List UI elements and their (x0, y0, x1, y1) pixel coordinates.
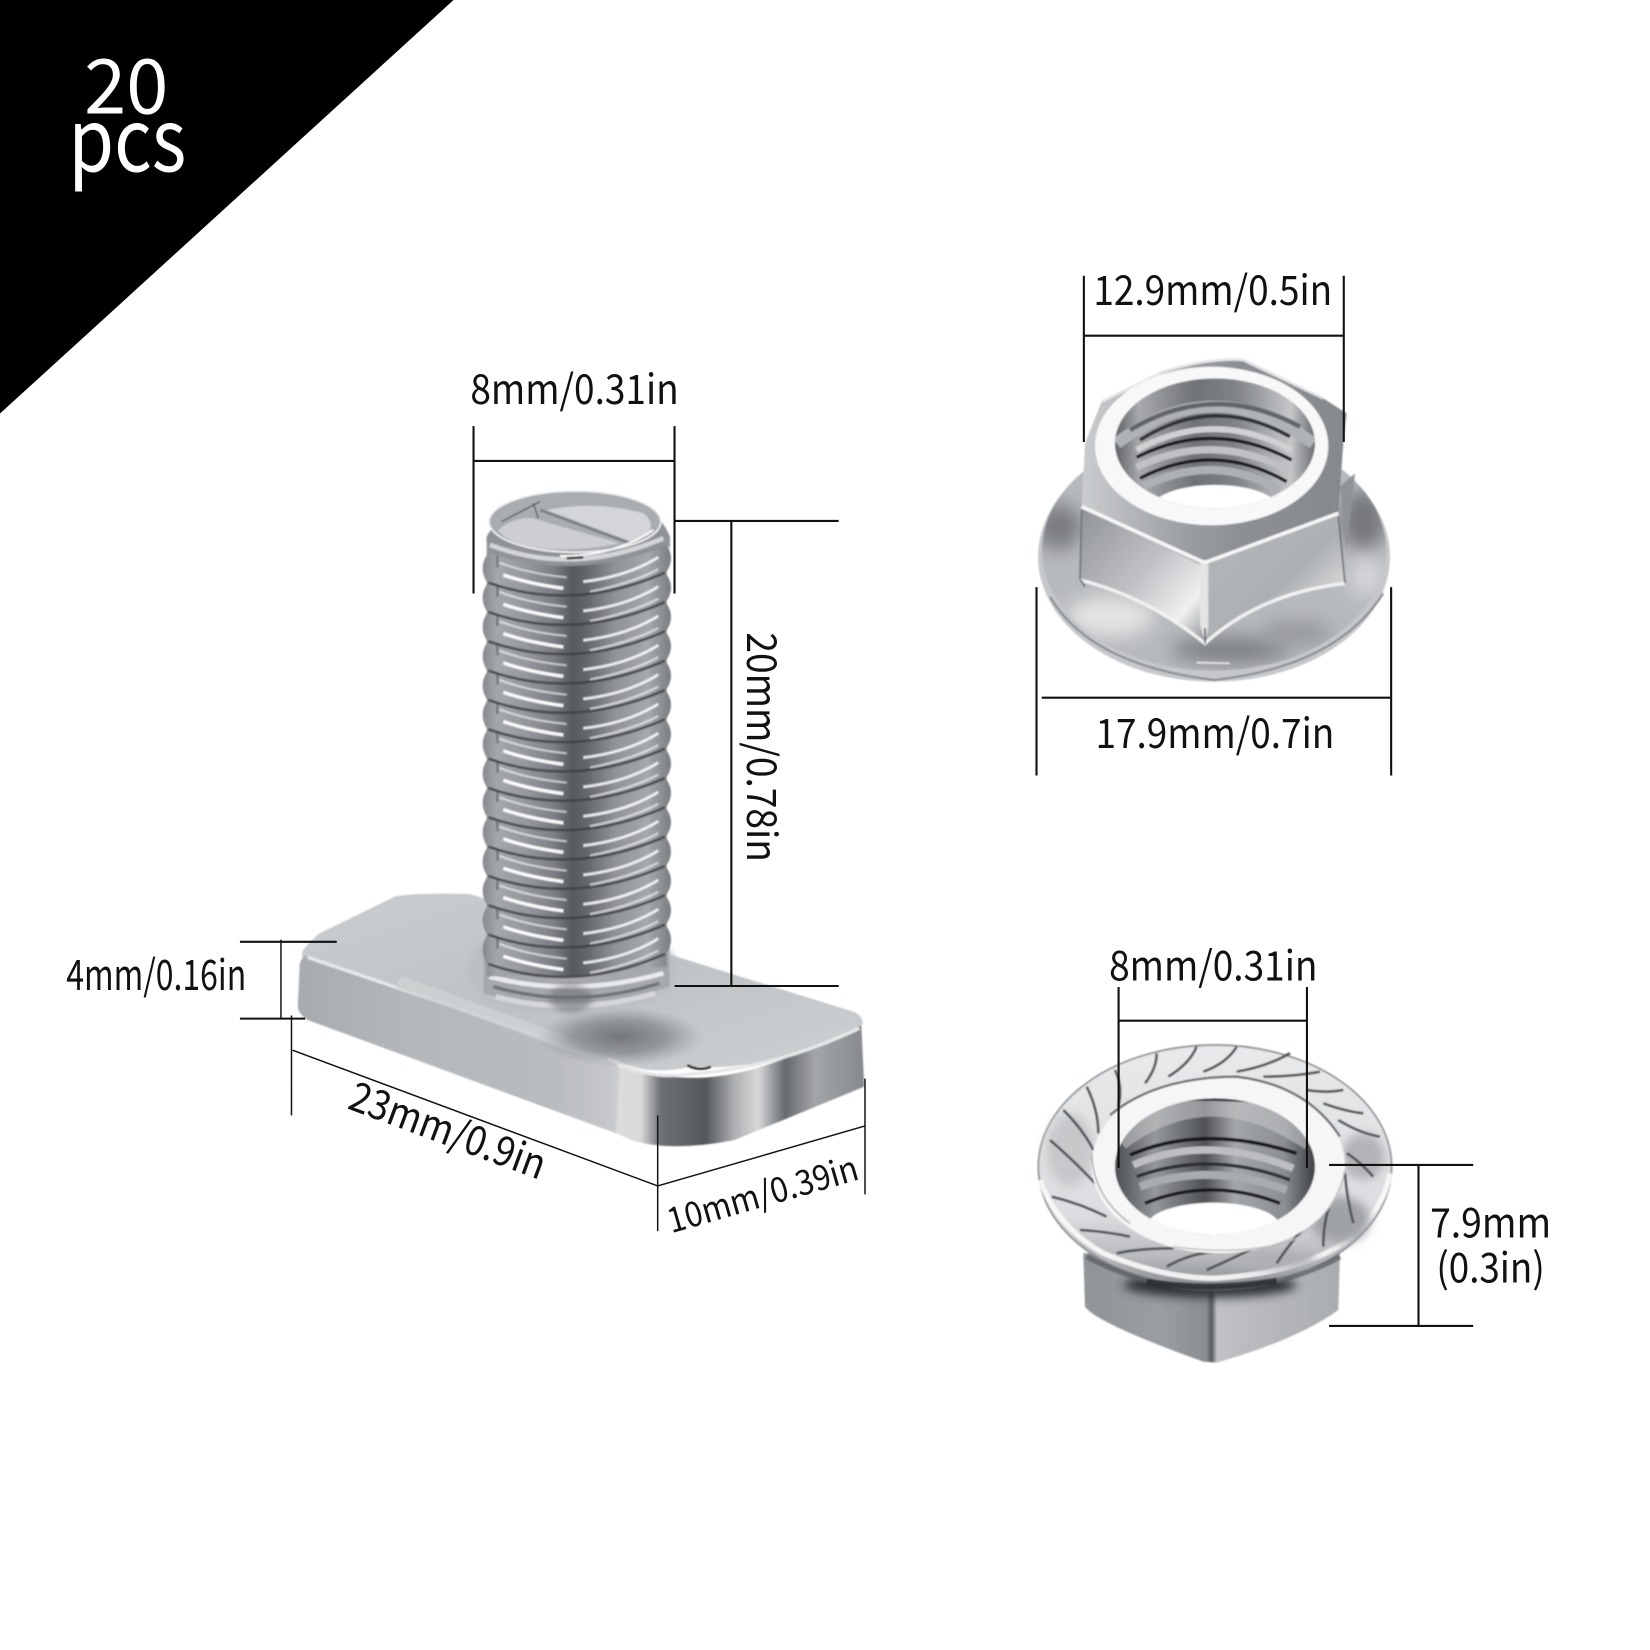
shadow below shaft (537, 1007, 703, 1067)
top nut hex faces (1080, 473, 1355, 643)
top nut flange (1037, 469, 1390, 682)
dimension: nut height 7.9mm (0.3in): (0.3in) (1436, 1235, 1545, 1295)
top flange nut (1035, 360, 1390, 682)
dimension: hex width 12.9mm/0.5in (1084, 257, 1344, 442)
dimension: flange diameter 17.9mm/0.7in: 17.9mm/0.7in (1095, 700, 1334, 760)
dimension: bolt diameter 8mm/0.31in (470, 356, 679, 593)
shaft collar (466, 943, 676, 1014)
slotted bolt end (486, 491, 670, 566)
bottom nut hex body (1083, 1253, 1340, 1363)
bottom nut serrated flange (1038, 1045, 1392, 1298)
dimension: head length 23mm/0.9in: 23mm/0.9in (342, 1063, 556, 1191)
plate top face (302, 894, 863, 1070)
corner badge: 20 pcs: 20 (84, 26, 168, 136)
dimension: nut height 7.9mm (0.3in) (1329, 1165, 1551, 1326)
dimension: head width 10mm/0.39in (658, 1079, 865, 1243)
top nut chamfered cap (1082, 360, 1347, 563)
top nut threaded bore (1114, 378, 1316, 498)
T-bolt head plate (298, 894, 864, 1146)
dimension: head thickness 4mm/0.16in: 4mm/0.16in (66, 942, 246, 1003)
bottom flange nut (1038, 1045, 1392, 1363)
dimension: head width 10mm/0.39in: 10mm/0.39in (660, 1141, 863, 1243)
dimension: head length 23mm/0.9in (291, 1015, 658, 1231)
dimension: hex width 12.9mm/0.5in: 12.9mm/0.5in (1093, 257, 1332, 317)
dimension: flange diameter 17.9mm/0.7in (1037, 587, 1391, 776)
bottom nut washer face (1092, 1077, 1345, 1253)
dimension: bolt length 20mm/0.78in: 20mm/0.78in (735, 632, 795, 862)
dimension: nut height 7.9mm (0.3in): 7.9mm (1430, 1190, 1551, 1250)
dimension: bolt length 20mm/0.78in (675, 521, 839, 986)
corner badge: 20 pcs: pcs (68, 72, 186, 198)
corner badge: 20 pcs (0, 0, 454, 414)
bottom nut threaded bore (1115, 1098, 1315, 1251)
plate bevel highlight (308, 957, 859, 1075)
dimension: bolt diameter 8mm/0.31in: 8mm/0.31in (470, 356, 679, 416)
plate front face (616, 1020, 864, 1146)
dimension: head thickness 4mm/0.16in (66, 940, 337, 1019)
dimension: bore 8mm/0.31in: 8mm/0.31in (1109, 933, 1317, 993)
plate side face (298, 955, 659, 1143)
dimension: bore 8mm/0.31in (1109, 933, 1317, 1168)
T-bolt threaded shaft (483, 491, 671, 977)
bottom nut flange ribs (1050, 1047, 1380, 1270)
